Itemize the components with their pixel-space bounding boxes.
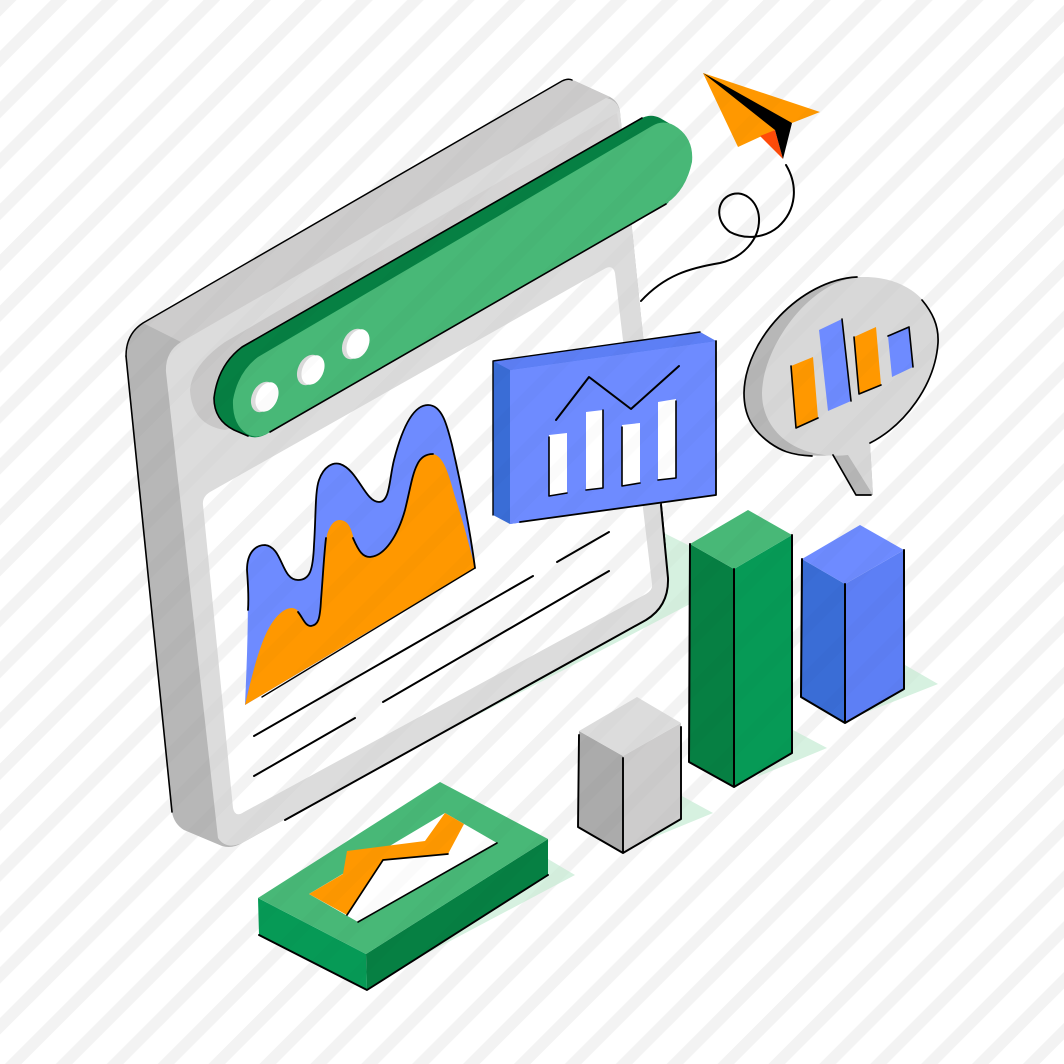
tray side left bbox=[258, 898, 367, 990]
blue chart card bbox=[493, 332, 716, 545]
tray orange line area bbox=[309, 813, 464, 915]
grey bar bbox=[578, 697, 681, 853]
window top face bbox=[143, 80, 610, 342]
title bar outline bbox=[214, 118, 666, 436]
bubble face bbox=[762, 277, 938, 495]
card outline bbox=[493, 332, 700, 515]
card white bars bbox=[549, 399, 676, 496]
text lines bbox=[254, 532, 609, 776]
title bar face bbox=[233, 122, 692, 437]
card top and side bbox=[493, 332, 716, 524]
orange area bbox=[245, 454, 475, 705]
title bar side bbox=[214, 116, 690, 437]
window front frame bbox=[166, 98, 668, 846]
bubble back bbox=[744, 277, 938, 495]
speech bubble bbox=[744, 277, 938, 495]
ground shadows bbox=[268, 533, 938, 966]
bubble outline bbox=[744, 277, 938, 495]
browser window bbox=[126, 79, 668, 847]
bubble bars bbox=[791, 319, 913, 428]
flight trail bbox=[641, 165, 794, 301]
paper plane bbox=[703, 73, 820, 159]
blue bar bbox=[801, 525, 904, 723]
card right edge of window behind bbox=[661, 503, 665, 545]
tray opening bbox=[309, 813, 497, 922]
green tray with chart bbox=[258, 782, 548, 990]
card face bbox=[510, 341, 716, 524]
window outline bbox=[126, 79, 668, 820]
card line graph bbox=[556, 366, 679, 420]
card bar outlines bbox=[549, 401, 676, 496]
blue area bbox=[245, 405, 475, 705]
chart outlines bbox=[247, 405, 475, 697]
title bar shadow bbox=[190, 113, 620, 430]
window dots bbox=[246, 325, 374, 416]
window silhouette: top and side faces bbox=[126, 80, 668, 847]
screen bbox=[203, 267, 652, 814]
title bar bbox=[214, 116, 692, 437]
green bar bbox=[689, 510, 792, 787]
tray top bbox=[258, 782, 548, 954]
area chart bbox=[245, 405, 475, 705]
tray outline bbox=[259, 843, 548, 990]
tray side right bbox=[366, 839, 548, 990]
